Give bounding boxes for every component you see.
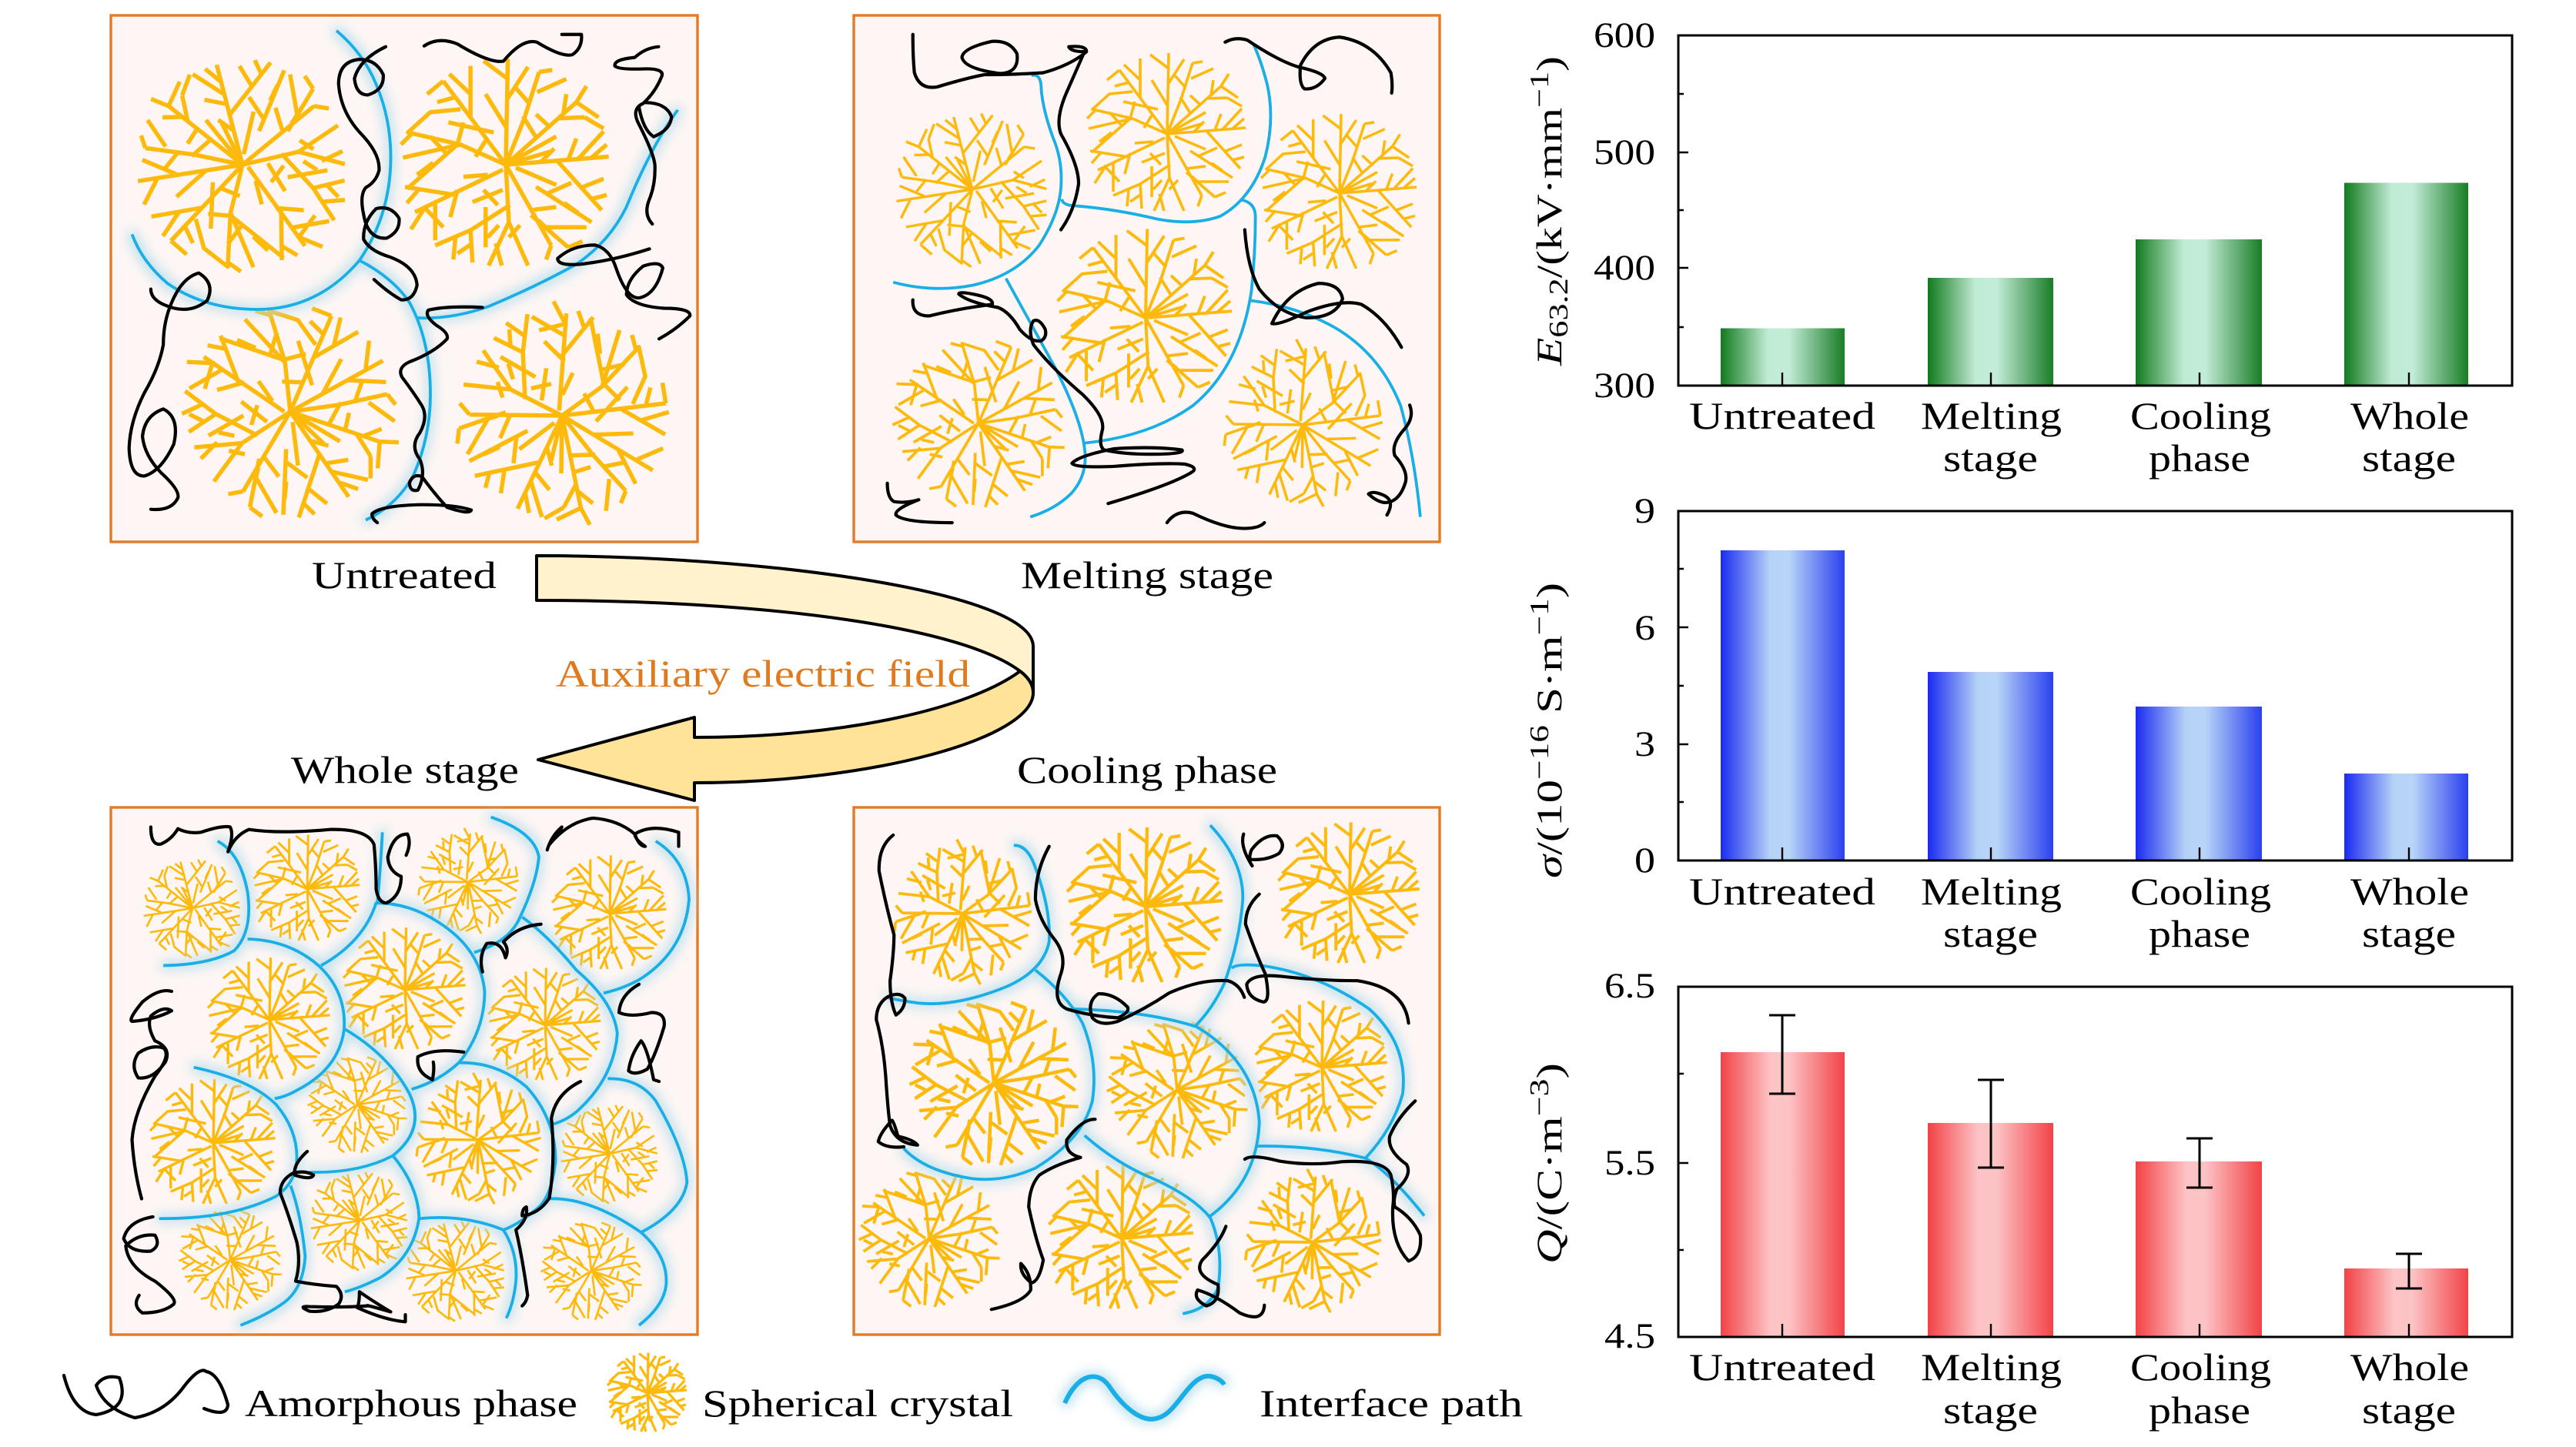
x category labels: phase [2149,912,2250,955]
x category labels: stage [2362,912,2456,955]
y tick labels: 6.5 [1604,966,1655,1006]
y tick labels: 5.5 [1604,1143,1655,1183]
bar chart: space charge [1524,966,2512,1432]
y axis title: σ/(10 [1530,797,1570,878]
panel: untreated [111,15,706,557]
spherical crystals [120,46,706,557]
x category labels: stage [2362,1389,2456,1432]
x category labels: Melting [1921,1345,2062,1389]
arrow lower band and head [538,671,1033,800]
y axis title: −16 [1524,725,1554,780]
bars [1721,1052,2468,1337]
y axis title: ) [1530,583,1570,598]
y tick labels [1634,491,1655,881]
x category labels: Whole [2350,394,2469,437]
x category labels: Untreated [1689,394,1875,437]
x category labels: phase [2149,436,2250,480]
y axis title: ) [1530,56,1570,72]
panel caption: Cooling phase: Cooling phase [1017,748,1277,791]
bars [1721,550,2468,861]
amorphous chains [888,35,1411,529]
y tick labels: 400 [1594,248,1655,288]
y axis title: −1 [1524,72,1554,108]
y tick labels [1594,15,1655,406]
x category labels: Cooling [2130,870,2271,913]
y tick labels [1604,966,1655,1356]
panel: whole stage [111,807,698,1335]
panel caption: Untreated: Untreated [312,553,497,597]
panel caption: Whole stage: Whole stage [291,748,519,791]
y axis title: E [1530,338,1570,366]
panel frame [854,807,1440,1335]
x category labels: phase [2149,1389,2250,1432]
x category labels [1689,394,2469,480]
axes frame and ticks [1678,35,2512,386]
x category labels: Untreated [1689,1345,1875,1389]
arrow: process flow [537,556,1033,800]
axes frame and ticks [1678,511,2512,861]
legend text: amorphous phase: Amorphous phase [245,1382,577,1425]
legend text: spherical crystal: Spherical crystal [702,1382,1013,1425]
y axis title: /(kV·mm [1530,108,1570,278]
arrow label: Auxiliary electric field [556,652,970,695]
interface paths [888,825,1424,1314]
bars [1721,183,2468,386]
x category labels: stage [2362,436,2456,480]
y tick labels: 500 [1594,132,1655,172]
y axis title: −3 [1524,1079,1554,1116]
error bars [1769,1015,2422,1288]
panel: cooling phase [838,807,1440,1335]
x category labels: Melting [1921,870,2062,913]
arrow upper band [537,556,1033,693]
interface paths [132,31,677,520]
y tick labels: 9 [1634,491,1655,531]
y axis title: 63.2 [1544,278,1574,338]
spherical crystals [135,815,666,1335]
y tick labels: 4.5 [1604,1316,1655,1356]
panel caption: Melting stage: Melting stage [1021,553,1273,597]
x category labels: stage [1943,1389,2038,1432]
y tick labels: 300 [1594,366,1655,406]
legend [64,1353,1523,1432]
bar chart: conductivity [1524,491,2512,955]
x category labels: Cooling [2130,1345,2271,1389]
legend icon: interface path [1065,1376,1224,1419]
x category labels [1689,870,2469,955]
panel frame [111,15,698,542]
panel frame [854,15,1440,542]
amorphous chains [124,818,679,1322]
y tick labels: 0 [1634,840,1655,881]
y tick labels: 600 [1594,15,1655,55]
axes frame and ticks [1678,987,2512,1337]
y tick labels: 6 [1634,608,1655,648]
legend icon: amorphous phase [64,1370,228,1418]
panel frame [111,807,698,1335]
x category labels: stage [1943,436,2038,480]
y axis title: Q/(C·m [1530,1143,1570,1264]
amorphous chains [876,834,1420,1317]
interface paths [159,817,689,1325]
x category labels: stage [1943,912,2038,955]
spherical crystals [838,822,1420,1333]
y axis title: ) [1530,1063,1570,1079]
legend icon: spherical crystal [607,1353,687,1432]
y axis title: S·m [1530,635,1570,725]
y tick labels: 3 [1634,724,1655,764]
panel: melting stage [854,15,1440,542]
x category labels: Cooling [2130,394,2271,437]
amorphous chains [129,35,690,523]
x category labels [1689,1345,2469,1432]
y axis title: −1 [1524,598,1554,635]
x category labels: Whole [2350,1345,2469,1389]
bar chart: breakdown strength [1524,15,2512,480]
spherical crystals [868,53,1417,534]
x category labels: Untreated [1689,870,1875,913]
interface paths [893,44,1420,517]
legend text: interface path: Interface path [1260,1382,1523,1425]
x category labels: Melting [1921,394,2062,437]
x category labels: Whole [2350,870,2469,913]
